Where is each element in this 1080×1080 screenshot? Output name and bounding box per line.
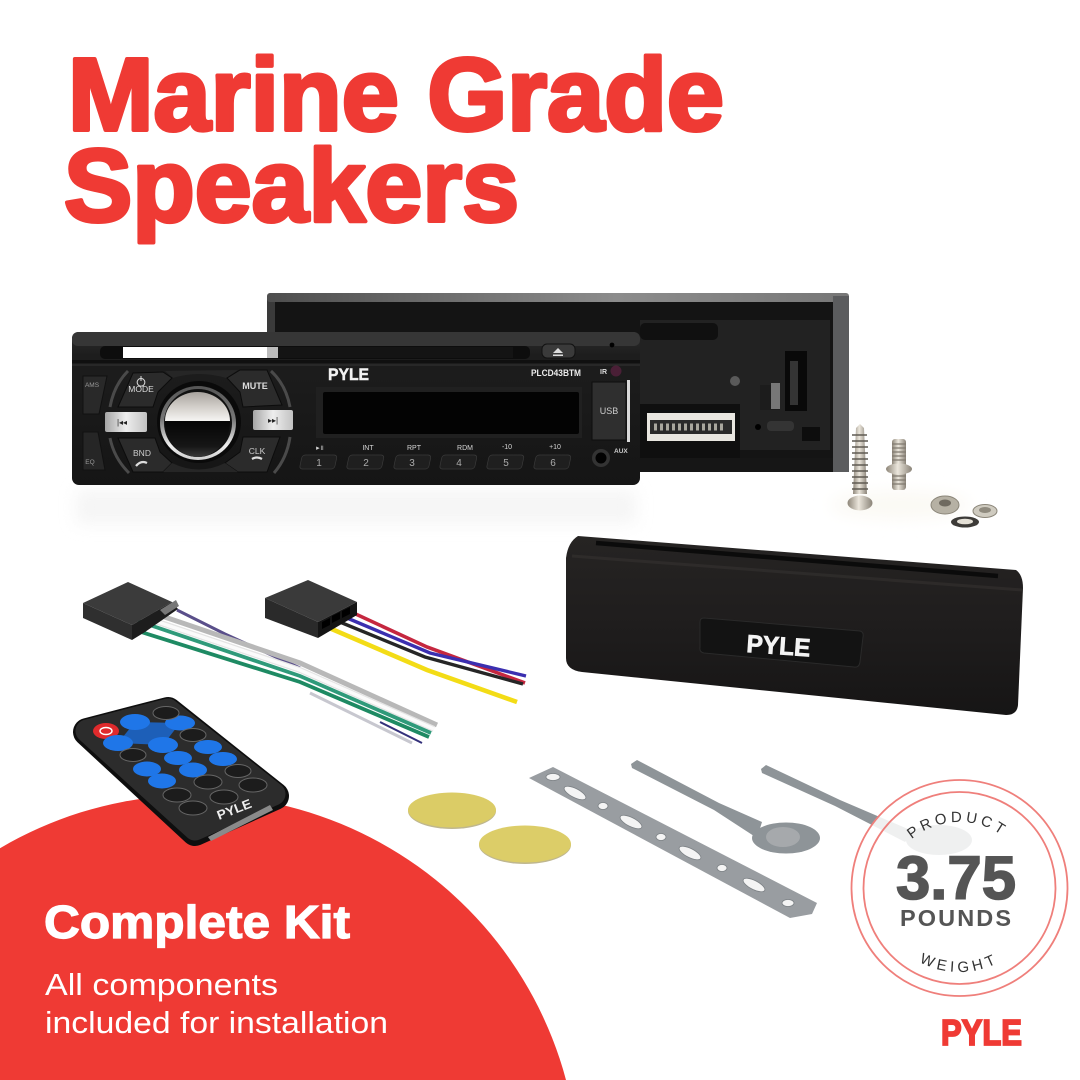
logo: Pyle: PYLE: [941, 1012, 1022, 1053]
brand and model: IR: [600, 369, 607, 376]
preset buttons: 4: [456, 458, 462, 469]
title: Marine Grade: [68, 37, 724, 152]
case label plate: PYLE: [746, 630, 811, 662]
connector body: [83, 582, 179, 640]
product weight badge: 3.75: [896, 844, 1016, 912]
USB port and aux: USB: [600, 406, 618, 416]
skip buttons: |◂◂: [117, 418, 127, 427]
preset buttons: [299, 444, 571, 469]
power button: [93, 723, 119, 739]
icon: adhesive pads: [408, 792, 571, 864]
callout: complete kit: Complete Kit: [44, 896, 350, 948]
volume knob: [157, 381, 241, 463]
control cluster: MODE: [128, 384, 154, 394]
product weight badge: POUNDS: [900, 905, 1011, 931]
wiring harness A: [83, 582, 437, 743]
rear clip: [730, 351, 820, 441]
blue buttons: [103, 714, 237, 788]
radio reflection shadow: [76, 490, 636, 524]
wiring harness B: [265, 580, 526, 702]
remote control: [87, 706, 275, 841]
long screw: [848, 424, 872, 510]
preset buttons: INT: [362, 445, 374, 452]
preset buttons: 6: [550, 458, 556, 469]
radio rear housing: [267, 293, 849, 472]
preset buttons: 2: [363, 458, 369, 469]
title: Speakers: [64, 128, 519, 243]
case label plate: [700, 618, 863, 667]
mounting bracket: [529, 767, 817, 918]
brand and model: PYLE: [328, 365, 369, 384]
left side buttons: [83, 376, 107, 470]
icon: mounting screws and nuts: [830, 424, 997, 528]
control cluster: BND: [133, 448, 151, 458]
preset buttons: 5: [503, 458, 509, 469]
callout: complete kit: [44, 896, 388, 1040]
left side buttons: EQ: [85, 459, 95, 466]
skip buttons: ▸▸|: [268, 416, 278, 425]
preset buttons: ▸॥: [316, 445, 324, 452]
brand and model: PLCD43BTM: [531, 368, 581, 378]
product weight badge: [850, 779, 1068, 997]
short stud: [886, 439, 912, 490]
release key 1: [631, 760, 820, 854]
preset buttons: 3: [409, 458, 415, 469]
title: [64, 37, 724, 243]
display: [316, 387, 582, 438]
faceplate case: [566, 536, 1023, 715]
remote control: PYLE: [215, 796, 254, 823]
preset buttons: RPT: [407, 445, 422, 452]
USB port and aux: [592, 380, 630, 467]
radio front panel: [72, 332, 640, 485]
dark buttons: [120, 706, 267, 815]
nuts and washer: [931, 496, 997, 528]
control cluster: [110, 370, 290, 473]
callout: complete kit: included for installation: [45, 1005, 388, 1040]
product weight badge: PRODUCT: [906, 812, 1006, 838]
red quarter circle panel: [0, 795, 566, 1080]
release key 2: [761, 765, 972, 855]
eject button: [542, 343, 614, 358]
preset buttons: +10: [549, 444, 561, 451]
connector body: [265, 580, 357, 638]
brand and model: [328, 365, 622, 384]
USB port and aux: AUX: [614, 448, 628, 455]
control cluster: MUTE: [242, 381, 268, 391]
left side buttons: AMS: [85, 382, 100, 389]
preset buttons: RDM: [457, 445, 473, 452]
product weight badge: WEIGHT: [922, 952, 993, 972]
preset buttons: 1: [316, 458, 322, 469]
control cluster: CLK: [249, 446, 266, 456]
skip buttons: [105, 410, 293, 432]
callout: complete kit: All components: [45, 967, 278, 1002]
disc slot: [100, 346, 530, 359]
preset buttons: -10: [502, 444, 512, 451]
rear connector socket: [647, 413, 735, 441]
